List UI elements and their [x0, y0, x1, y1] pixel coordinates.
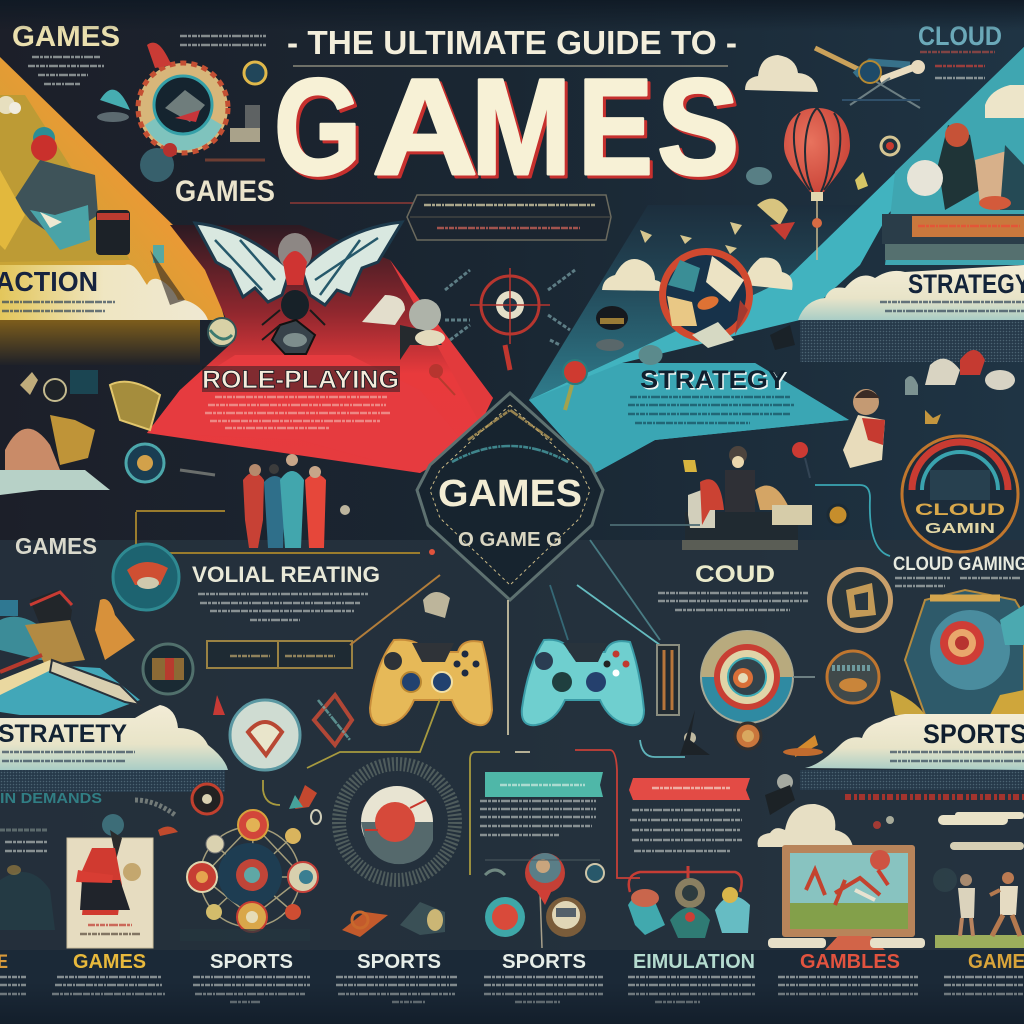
text block: coud	[658, 593, 808, 610]
secondary heading: GAMES	[175, 175, 275, 208]
title: - THE ULTIMATE GUIDE TO -	[287, 24, 737, 61]
panel: action band with cloud	[0, 250, 208, 320]
heading: left games: GAMES	[15, 533, 97, 559]
icon: trophy-like ornament	[289, 785, 321, 824]
icon: arcade cloud-gaming emblem	[902, 436, 1018, 552]
icon: plane	[815, 48, 925, 108]
panel: strategy teal wedge	[529, 47, 1024, 473]
text block: volial reating	[198, 594, 368, 620]
heading: volial reating: VOLIAL REATING	[192, 562, 380, 587]
main heading: S	[660, 53, 742, 206]
main heading: A	[375, 54, 481, 207]
icon: players group	[136, 454, 420, 555]
text block: red label	[630, 810, 742, 851]
connectors: center lines	[263, 525, 700, 878]
panel: band title left	[0, 790, 102, 930]
panel: center diamond: GAMES	[438, 473, 582, 515]
icon: balloon badges	[485, 853, 604, 948]
icon: teal controller	[522, 640, 644, 725]
panel: sports band	[800, 714, 1024, 790]
icon: strategy person	[843, 350, 1015, 468]
icon: simulation figures with bracket	[628, 866, 750, 938]
chart: orbital node network	[180, 810, 318, 935]
bottom text blocks	[0, 977, 1024, 1002]
icon: sports emblem	[890, 590, 1024, 715]
heading: cloud: CLOUD	[918, 21, 1002, 51]
icon: small mascots	[342, 902, 445, 937]
panel: strategy band with clouds	[798, 85, 1024, 362]
plaque	[290, 195, 611, 240]
icon: arcade cloud-gaming emblem: CLOUD	[915, 500, 1005, 519]
icon: soccer ball	[659, 248, 753, 348]
heading: coud: COUD	[695, 561, 775, 588]
main heading: M	[471, 51, 571, 204]
icon: pole strip	[657, 645, 679, 715]
icon: oval medallion	[827, 651, 879, 703]
teal pill label	[485, 772, 603, 797]
icon: players on field	[933, 812, 1024, 948]
plaque: paired labels	[207, 549, 440, 668]
icon: round badge	[113, 544, 179, 610]
icon: small sports figures	[680, 710, 823, 790]
icon: small floating items	[640, 137, 899, 254]
bottom labels: GAMBLES	[800, 951, 900, 973]
icon: small swirl	[135, 784, 222, 836]
text block: strategy	[628, 397, 795, 423]
text block: role-playing	[205, 397, 390, 428]
bottom labels: GAMES	[73, 951, 146, 973]
icon: small red pin	[683, 442, 810, 478]
icon: action scene	[0, 95, 164, 263]
icon: small strategy items	[563, 306, 795, 410]
icon: top cloud	[745, 55, 818, 92]
bottom labels: SPORTS	[502, 951, 586, 973]
connector: teal cloud line	[815, 485, 890, 556]
icon: floating dark items	[765, 785, 894, 829]
main heading: E	[578, 50, 653, 204]
main heading: S	[657, 50, 739, 203]
icon: target shield	[213, 695, 352, 770]
icon: top emblem	[97, 43, 266, 182]
heading: strategy: STRATEGY	[640, 366, 786, 394]
panel: center diamond	[417, 393, 603, 600]
icon: left scene	[0, 590, 140, 715]
main heading: M	[474, 54, 574, 207]
heading: role-playing: ROLE-PLAYING	[202, 366, 399, 394]
main heading: A	[372, 51, 478, 204]
icon: bat creature	[195, 222, 402, 354]
icon: red ball with hatched ring	[339, 764, 455, 880]
bottom labels: EIMULATION	[633, 951, 755, 973]
red pill label	[629, 778, 750, 800]
main heading: E	[581, 53, 656, 207]
panel: strategy band left: STRATETY	[0, 720, 127, 748]
icon: portrait	[423, 592, 450, 618]
icon: red fringe	[845, 794, 1024, 800]
decorative rules	[293, 65, 728, 67]
panel: strategy band left	[0, 705, 228, 792]
icon: target wheel	[701, 631, 815, 723]
bottom labels: SPORTS	[210, 951, 293, 973]
main heading: G	[277, 53, 364, 207]
panel: band title left: IN DEMANDS	[0, 790, 102, 807]
panel: role-playing red wedge	[147, 225, 493, 473]
icon: strategy scene	[882, 123, 1024, 260]
icon: clouds by soccer ball	[602, 258, 793, 291]
icon: arcade cloud-gaming emblem: GAMIN	[925, 520, 995, 537]
main heading: G	[274, 50, 361, 204]
top-left heading	[12, 21, 266, 84]
bottom labels: SPORTS	[357, 951, 441, 973]
icon: left cluster	[0, 370, 215, 495]
icon: central building	[682, 446, 848, 550]
text block: teal label	[480, 801, 596, 835]
panel: action wedge	[0, 57, 225, 365]
panel: center diamond: O GAME G	[458, 529, 562, 551]
main heading	[274, 50, 742, 207]
panel: person card	[67, 814, 153, 948]
heading: cloud	[918, 21, 1002, 78]
icon: compass target	[429, 268, 575, 395]
icon: rocks and clouds	[362, 295, 445, 360]
icon: hot-air balloon	[784, 108, 850, 260]
heading: cloud gaming	[893, 554, 1024, 586]
bottom labels	[0, 951, 1024, 973]
icon: yellow controller	[370, 640, 492, 725]
icon: monitor with cloud	[758, 804, 925, 950]
top-left heading: GAMES	[12, 21, 120, 53]
icon: coud medallion	[827, 567, 893, 633]
heading: strategy: STRATEGY	[642, 368, 788, 396]
icon: round badge two	[143, 644, 193, 694]
